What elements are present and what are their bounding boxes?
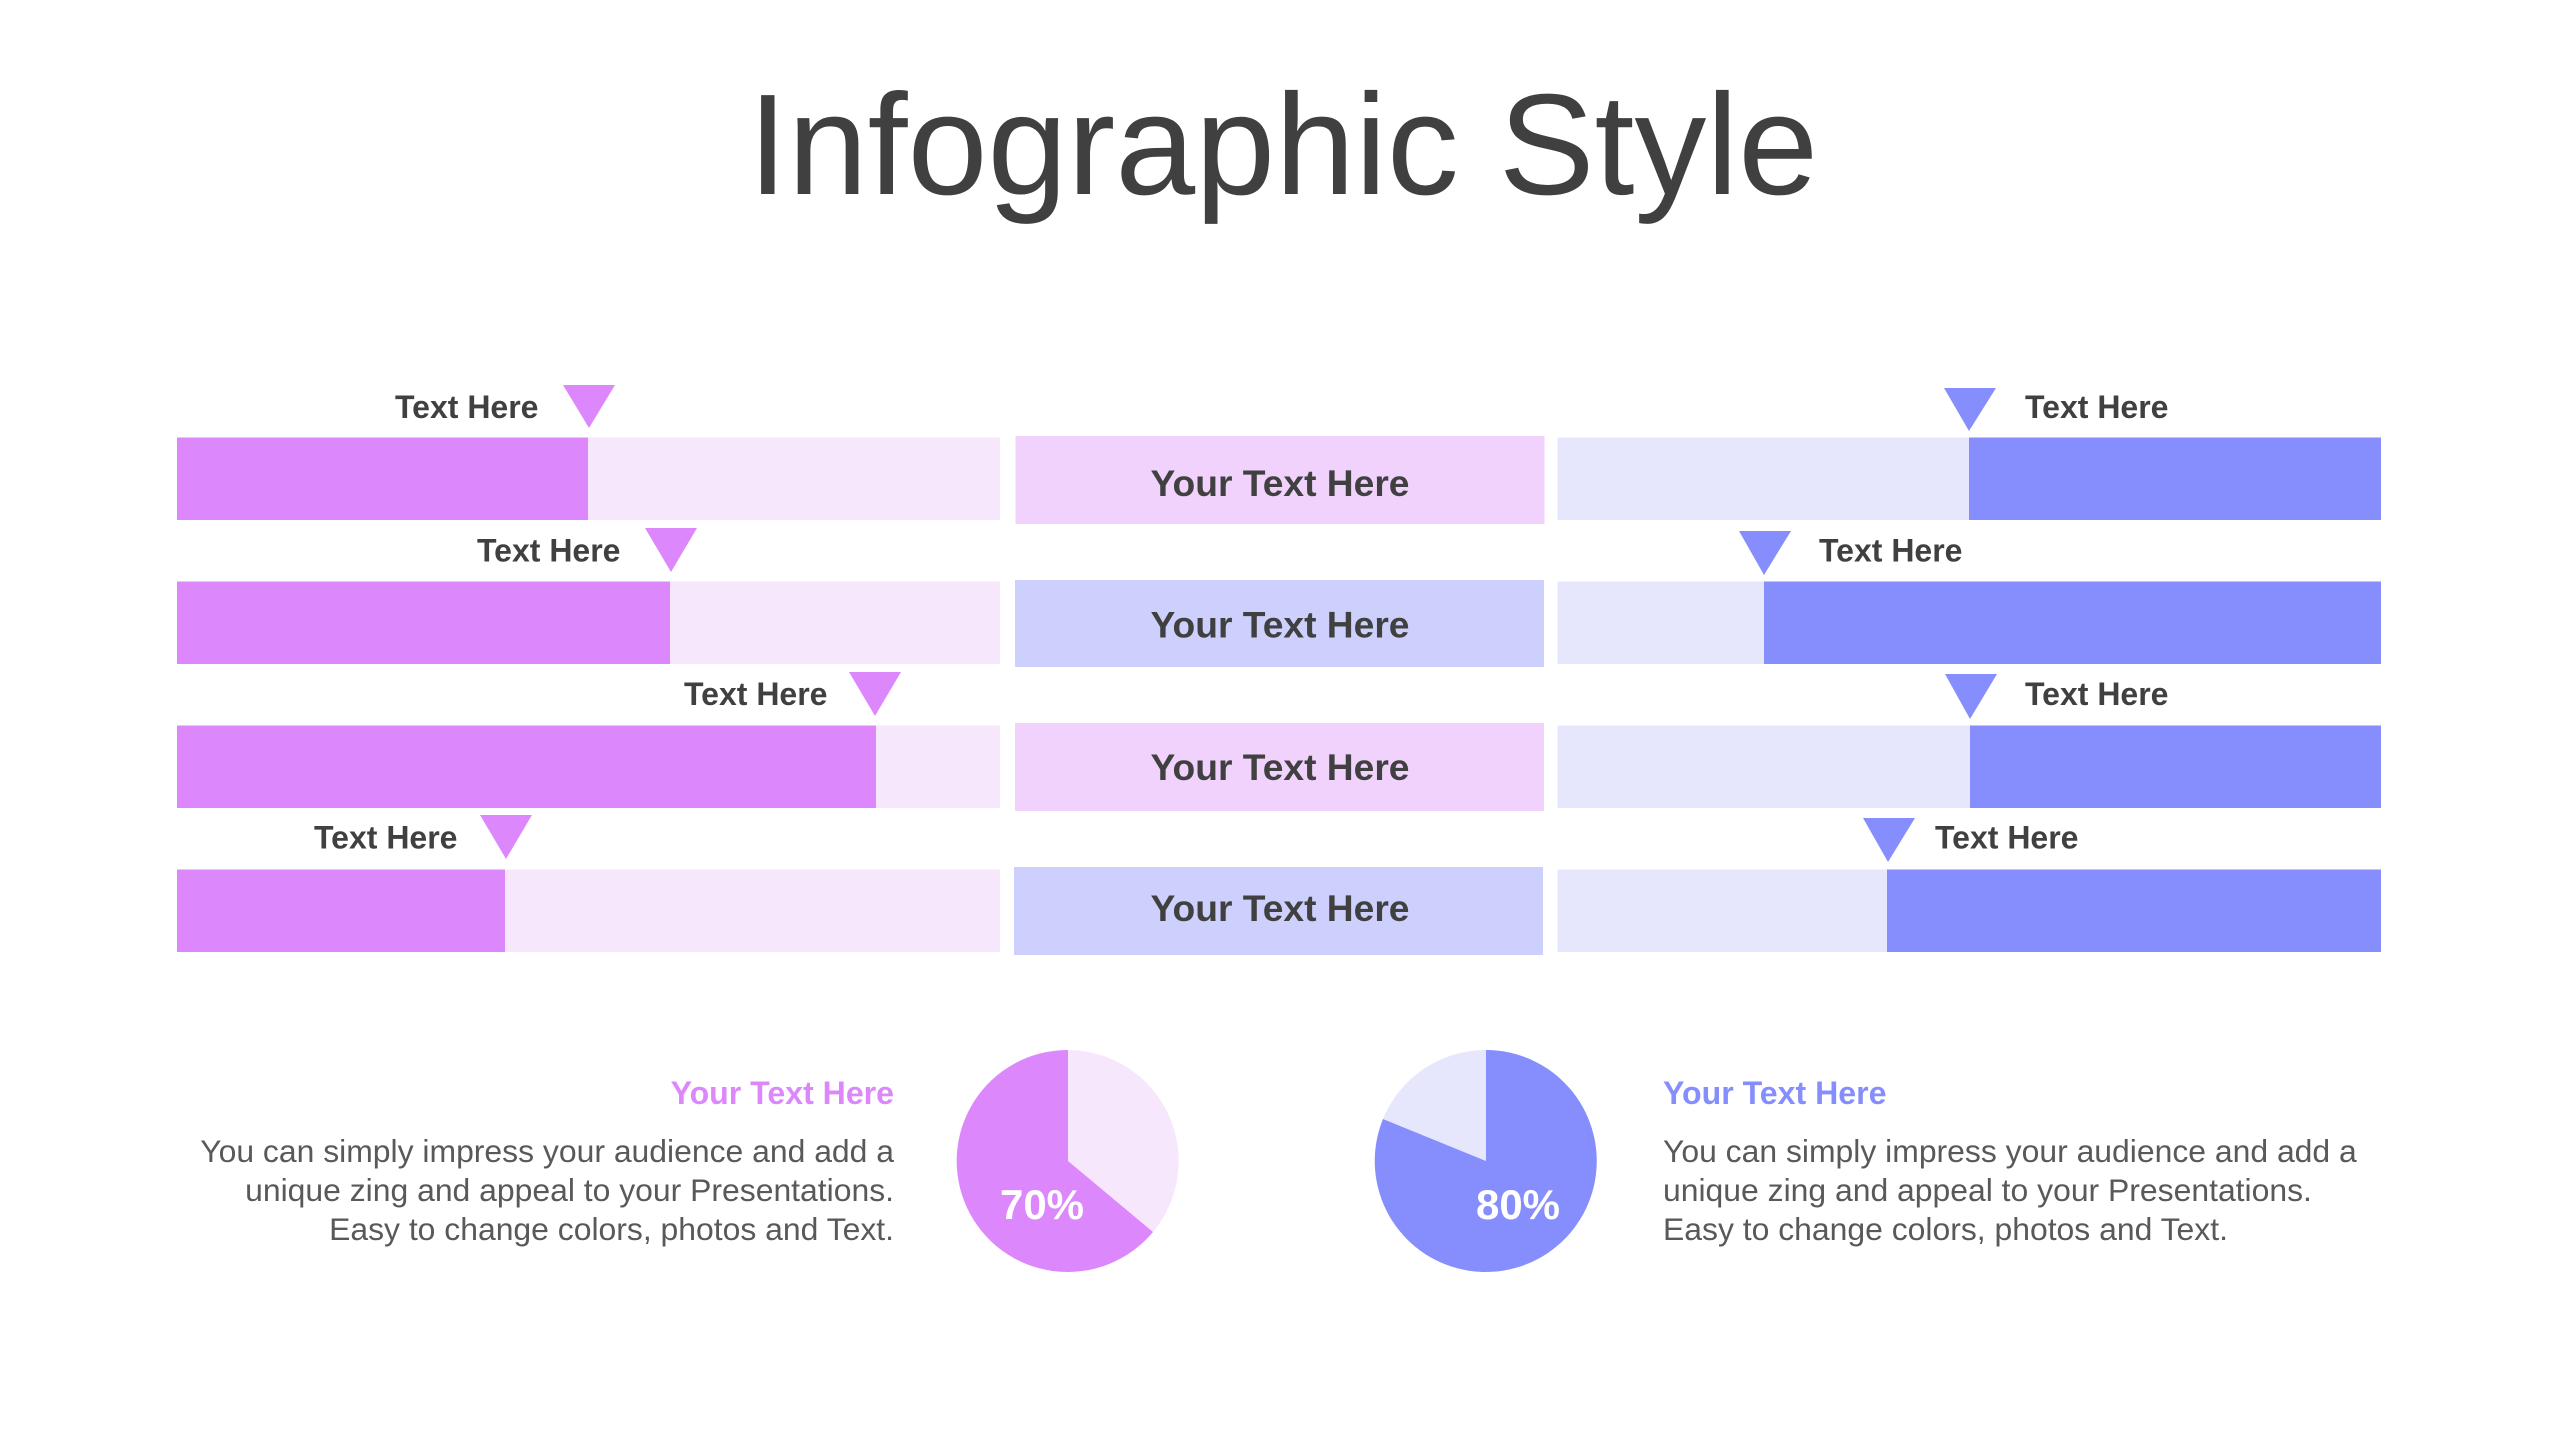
right pie chart 80%: 80% [1476,1181,1560,1228]
left paragraph [200,1133,894,1247]
left heading: Your Text Here [671,1075,894,1111]
left bar row 1: Text Here [395,389,538,425]
left paragraph: unique zing and appeal to your Presentations. [245,1172,894,1208]
right bar row 4 [1558,818,2381,952]
left bar row 4: Text Here [314,820,457,856]
left bar row 4 [177,815,1000,952]
right text block [1663,1075,2357,1247]
center label row 4: Your Text Here [1150,887,1410,929]
title: Infographic Style [748,65,1818,225]
right bar row 3: Text Here [2025,676,2168,712]
right bar row 2: Text Here [1819,532,1962,568]
center label row 3: Your Text Here [1150,746,1410,788]
right paragraph: You can simply impress your audience and add a [1663,1133,2357,1169]
center label row 1 [1016,436,1544,524]
center label row 1: Your Text Here [1150,462,1410,504]
left bar row 2: Text Here [477,532,620,568]
center label row 3 [1015,723,1544,811]
right paragraph: unique zing and appeal to your Presentations. [1663,1172,2312,1208]
left bar row 1 [177,385,1000,520]
left text block [200,1075,894,1247]
left bar row 3: Text Here [684,676,827,712]
right bar row 4: Text Here [1935,820,2078,856]
right bar row 2 [1558,531,2381,664]
left bar row 3 [177,672,1000,808]
right heading: Your Text Here [1663,1075,1886,1111]
center label row 2: Your Text Here [1150,604,1410,646]
right bar row 1 [1558,388,2381,520]
center label row 2 [1015,580,1544,667]
center label row 4 [1014,867,1543,955]
right pie chart 80% [1375,1050,1597,1272]
left paragraph: Easy to change colors, photos and Text. [329,1211,894,1247]
left paragraph: You can simply impress your audience and add a [200,1133,894,1169]
right bar row 3 [1558,674,2381,808]
left pie chart 70% [957,1050,1179,1272]
left pie chart 70%: 70% [1000,1181,1084,1228]
left bar row 2 [177,528,1000,664]
right paragraph [1663,1133,2357,1247]
right bar row 1: Text Here [2025,389,2168,425]
right paragraph: Easy to change colors, photos and Text. [1663,1211,2228,1247]
